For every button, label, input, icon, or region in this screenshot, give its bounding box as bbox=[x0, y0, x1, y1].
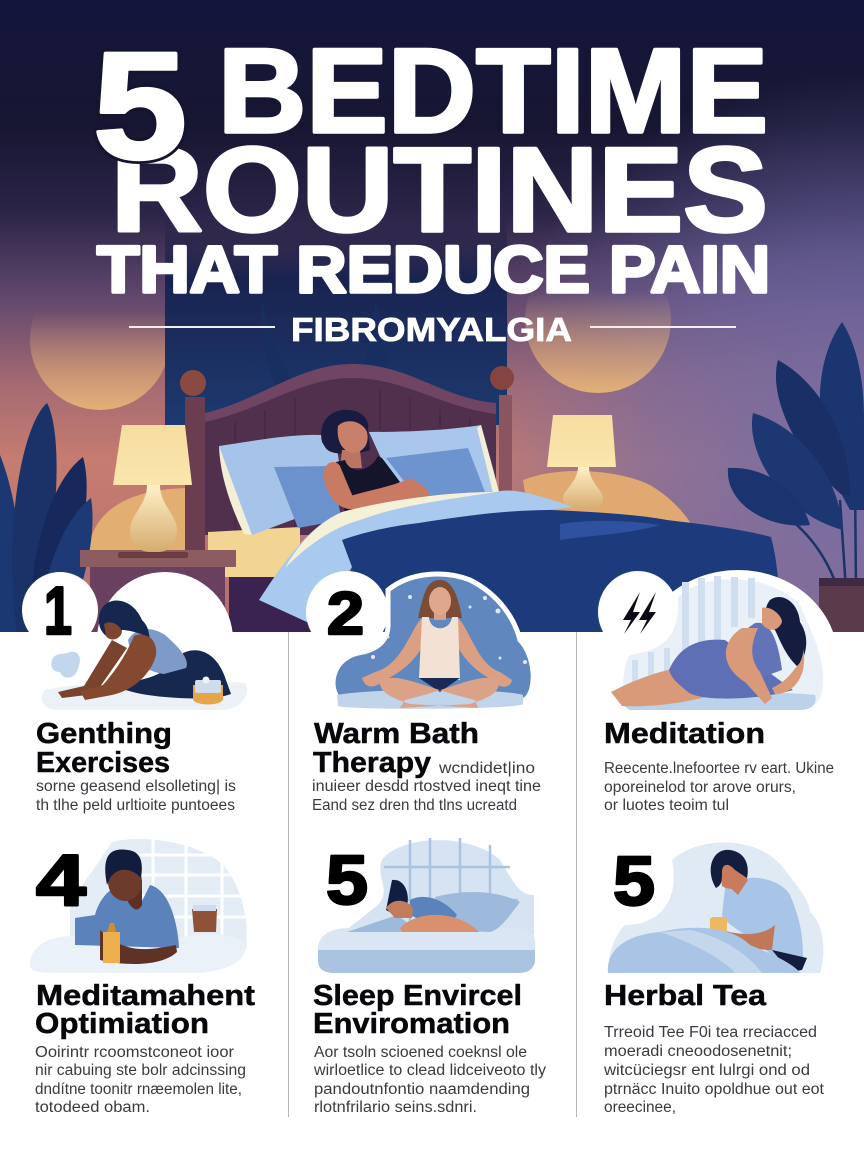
body text bbox=[604, 760, 834, 814]
body text: totodeed obam. bbox=[35, 1099, 150, 1116]
illustration: seated meditation bbox=[306, 571, 533, 709]
plant left bbox=[0, 403, 93, 640]
card 5: sleep environment bbox=[313, 838, 546, 1116]
number 2: 2 bbox=[327, 580, 364, 647]
illustration: person with tea in bed bbox=[608, 842, 823, 973]
title: 5 bbox=[93, 21, 187, 191]
body text: th tlhe peld urltioite puntoees bbox=[36, 797, 235, 814]
title: BEDTIME bbox=[218, 24, 768, 158]
pillows bbox=[219, 435, 345, 535]
lamp left on nightstand bbox=[80, 425, 236, 637]
white card panel bbox=[0, 632, 864, 1152]
background: night bedroom wall bbox=[0, 0, 864, 640]
body text: nir cabuing ste bolr adcinssing bbox=[35, 1062, 246, 1079]
illustration: person with oil bottle bbox=[30, 838, 247, 973]
body text: rlotnfrilario seins.sdnri. bbox=[314, 1099, 477, 1116]
body text: wcndidet|ino bbox=[438, 760, 535, 777]
title: ROUTINES bbox=[111, 123, 768, 257]
card 3: meditation bbox=[598, 570, 838, 814]
card 4: meditamahent optimiation bbox=[30, 838, 255, 1116]
body text: moeradi cneoodosenetnit; bbox=[604, 1043, 792, 1060]
body text: sorne geasend elsolleting| is bbox=[36, 778, 236, 795]
body text: inuieer desdd rtostved ineqt tine bbox=[312, 778, 541, 795]
subtitle: fibromyalgia with rules: FIBROMYALGIA bbox=[291, 311, 572, 348]
body text bbox=[603, 1024, 825, 1116]
body text bbox=[312, 760, 541, 814]
lamp right bbox=[547, 415, 616, 510]
heading: Warm Bath bbox=[314, 718, 479, 750]
illustration: reclining woman bbox=[598, 570, 838, 750]
heading: Meditation bbox=[604, 718, 765, 750]
body text: Aor tsoln scioened coeknsl ole bbox=[314, 1044, 527, 1061]
body text bbox=[35, 1044, 246, 1116]
body text: Trreoid Tee F0i tea rreciacced bbox=[604, 1024, 817, 1041]
card 6: herbal tea bbox=[603, 842, 825, 1116]
number 5: 5 bbox=[326, 841, 368, 919]
body text: or luotes teoim tul bbox=[604, 797, 729, 814]
headboard bbox=[205, 364, 496, 535]
body text bbox=[36, 778, 236, 814]
heading: Enviromation bbox=[313, 1008, 510, 1040]
body text: Eand sez dren thd tlns ucreatd bbox=[312, 797, 517, 814]
heading: Exercises bbox=[36, 747, 170, 779]
heading: Therapy bbox=[313, 747, 431, 779]
body text: witcüciegsr ent lulrgi ond od bbox=[603, 1062, 810, 1079]
light sheet bbox=[259, 491, 573, 623]
body text: dndítne toonitr rnæemolen lite, bbox=[35, 1081, 242, 1098]
heading bbox=[35, 980, 255, 1040]
heading: Herbal Tea bbox=[604, 980, 767, 1012]
body text bbox=[313, 1044, 546, 1116]
number 5: 5 bbox=[613, 842, 655, 920]
heading bbox=[313, 980, 522, 1040]
body text: Reecente.lnefoortee rv eart. Ukine bbox=[604, 760, 834, 777]
plant right bbox=[728, 322, 864, 634]
number 4: 4 bbox=[36, 841, 86, 921]
title bbox=[93, 21, 770, 306]
sleeping woman bbox=[321, 410, 433, 512]
card 2: warm bath therapy bbox=[306, 571, 541, 814]
heading: Meditamahent bbox=[36, 980, 255, 1012]
title: 5 bbox=[93, 21, 187, 191]
body text: pandoutnfontio naamdending bbox=[314, 1081, 530, 1098]
body text: oreecinee, bbox=[604, 1099, 676, 1116]
body text: ptrnäcc Inuito opoldhue out eot bbox=[604, 1081, 825, 1098]
curtain behind bed bbox=[165, 215, 507, 425]
body text: oporeinelod tor arove orurs, bbox=[604, 779, 796, 796]
heading bbox=[313, 718, 479, 779]
title: THAT REDUCE PAIN bbox=[97, 232, 770, 306]
number 1: 1 bbox=[44, 573, 72, 649]
heading: Sleep Envircel bbox=[313, 980, 522, 1012]
column dividers bbox=[288, 632, 577, 1117]
heading: Genthing bbox=[36, 718, 172, 750]
illustration: kneeling stretch bbox=[22, 572, 247, 710]
heading bbox=[36, 718, 172, 779]
mattress and frame bbox=[208, 527, 300, 577]
lamp glow halos bbox=[30, 247, 692, 550]
navy blanket bbox=[325, 510, 779, 640]
card 1: gentle stretching exercises bbox=[22, 572, 247, 814]
body text: wirloetlice to clead lidceiveoto tly bbox=[313, 1062, 546, 1079]
body text: Ooirintr rcoomstconeot ioor bbox=[35, 1044, 234, 1061]
bed with headboard, pillows and blanket bbox=[180, 364, 779, 640]
heading: Optimiation bbox=[35, 1008, 209, 1040]
icon: lightning bolts bbox=[623, 592, 656, 634]
illustration: person sleeping on bed bbox=[318, 838, 535, 973]
